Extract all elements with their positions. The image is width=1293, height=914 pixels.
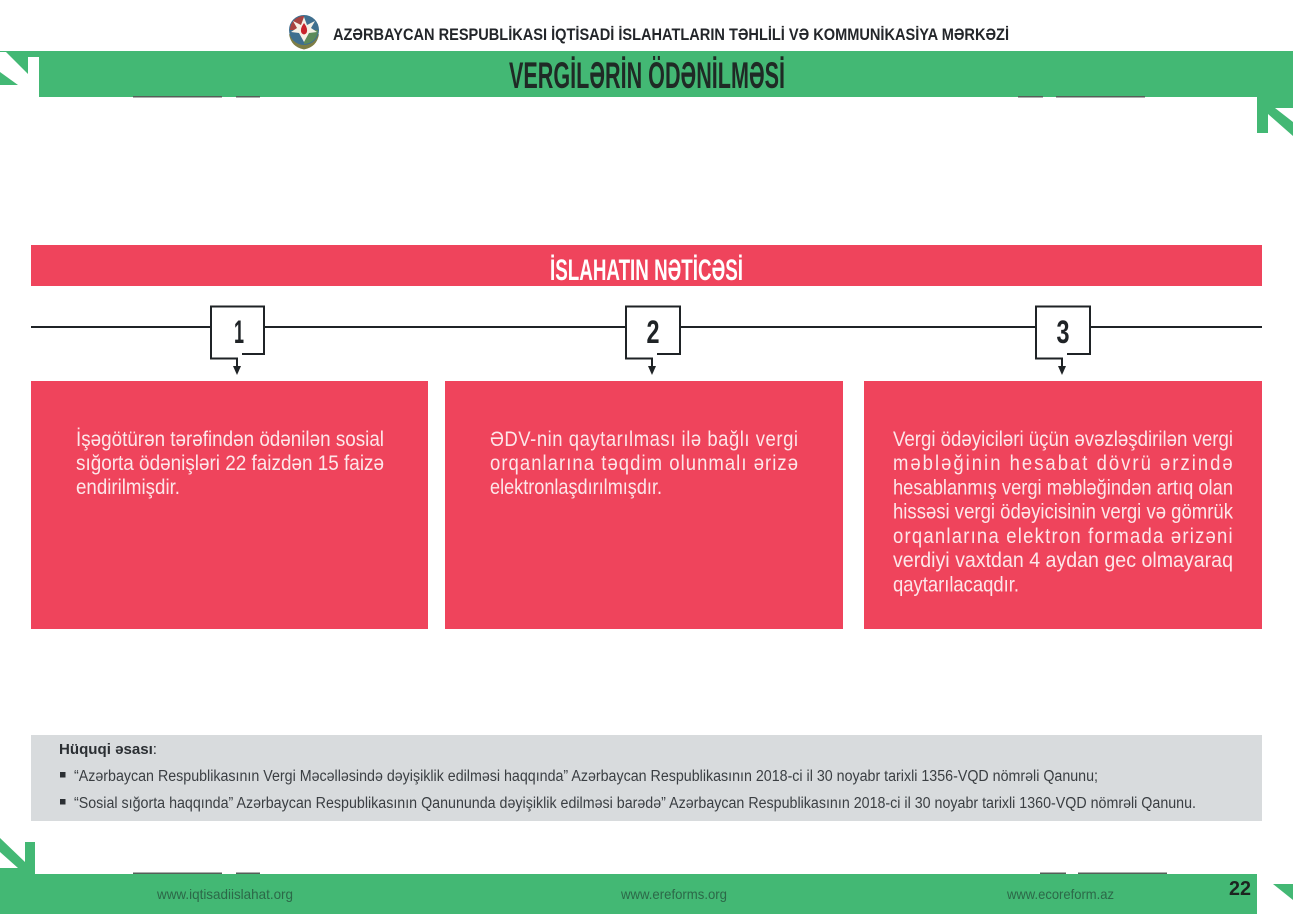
bottom green footer band [0,872,1257,914]
icon: top-right corner arrow [1257,97,1293,136]
panel: result 2 [445,381,843,629]
panel: result 1 [31,381,428,629]
panel: result 3: məbləğinin hesabat dövrü ərzində [893,452,1233,475]
panel: result 3 [864,381,1262,629]
page number: 22 [1229,878,1251,900]
panel: result 1: sığorta ödənişləri 22 faizdən 15 faizə [76,452,384,475]
panel: result 1: İşəgötürən tərəfindən ödənilən sosial [76,428,384,451]
panel: result 3: verdiyi vaxtdan 4 aydan gec olmayaraq [893,549,1233,572]
panel: result 3: Vergi ödəyiciləri üçün əvəzləşdirilən vergi [893,428,1233,451]
step marker 3: 3 [1056,314,1070,350]
footer link 2: www.ereforms.org [620,886,727,902]
step marker 1 [211,306,264,375]
page title: VERGİLƏRİN ÖDƏNİLMƏSİ [509,55,785,96]
panel: result 3: hissəsi vergi ödəyicisinin vergi və gömrük [893,501,1233,524]
icon: bottom-left corner arrow [0,838,35,874]
panel: legal basis: “Sosial sığorta haqqında” Azərbaycan Respublikasının Qanununda dəyişiklik edilməsi barədə” Azərbaycan Respublikasının 2018-ci il 30 noyabr tarixli 1360-VQD nömrəli Qanunu. [74,795,1196,812]
panel: result 3: qaytarılacaqdır. [893,574,1019,596]
result heading bar [31,245,1262,287]
footer link 1: www.iqtisadiislahat.org [156,886,293,902]
result heading bar: İSLAHATIN NƏTİCƏSİ [550,254,743,287]
panel: result 2: orqanlarına təqdim olunmalı ərizə [490,452,798,475]
panel: result 2: ƏDV-nin qaytarılması ilə bağlı vergi [490,428,798,451]
step marker 3 [1036,306,1090,375]
panel: result 3: hesablanmış vergi məbləğindən artıq olan [893,476,1233,499]
top green title band [0,51,1293,98]
step marker 2 [626,306,680,375]
step marker 1: 1 [234,314,244,350]
panel: result 1: endirilmişdir. [76,476,180,499]
panel: result 2: elektronlaşdırılmışdır. [490,476,662,499]
panel: legal basis [31,735,1262,821]
icon: top-left corner arrow [0,52,39,97]
timeline line [31,326,1262,328]
footer link 3: www.ecoreform.az [1006,886,1114,902]
panel: legal basis: “Azərbaycan Respublikasının Vergi Məcəlləsində dəyişiklik edilməsi haqqında” Azərbaycan Respublikasının 2018-ci il 30 noyabr tarixli 1356-VQD nömrəli Qanunu; [74,768,1098,785]
icon: bottom-right corner arrow [1273,884,1293,900]
icon: state emblem [289,15,319,50]
panel: legal basis: Hüquqi əsası: [59,741,157,758]
step marker 2: 2 [646,314,660,350]
panel: result 3: orqanlarına elektron formada ərizəni [893,525,1233,548]
header organisation name: AZƏRBAYCAN RESPUBLİKASI İQTİSADİ İSLAHATLARIN TƏHLİLİ VƏ KOMMUNİKASİYA MƏRKƏZİ [333,26,1009,44]
